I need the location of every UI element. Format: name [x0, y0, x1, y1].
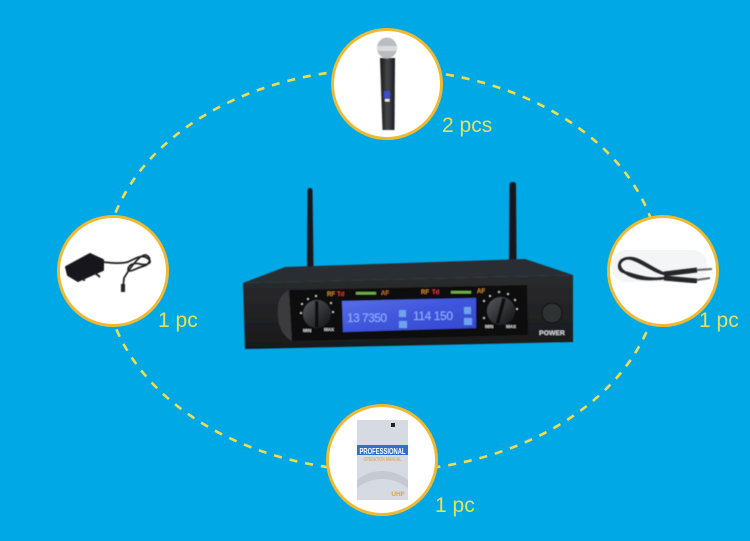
icon: manual booklet: OPERATION MANUAL [364, 457, 402, 463]
RF AF indicators [327, 289, 485, 298]
RF AF indicators: AF [477, 289, 485, 295]
receiver front [243, 275, 573, 349]
power button [542, 303, 562, 323]
power label: POWER [539, 330, 565, 337]
RF AF indicators: RF [327, 292, 335, 298]
frequency left: 13 7350 [347, 311, 387, 325]
level meters [356, 291, 471, 294]
knob labels: MAX [506, 324, 516, 329]
mic circle [332, 30, 442, 138]
panel notch [278, 290, 292, 341]
RF AF indicators: Td [432, 290, 440, 296]
knob labels: MAX [324, 327, 334, 332]
knob labels [303, 324, 516, 333]
manual circle [328, 406, 436, 514]
quantity label: 1 pc [158, 309, 198, 332]
channel boxes [399, 307, 472, 328]
icon: manual booklet: UHF [391, 491, 405, 498]
icon: power adapter [66, 254, 150, 292]
icon: manual booklet [357, 420, 408, 500]
RF AF indicators: AF [381, 291, 389, 297]
cable photo shadow [612, 250, 707, 282]
adapter circle [58, 216, 168, 326]
item: microphone [332, 30, 492, 138]
dashed ellipse connector [104, 69, 660, 471]
cable circle [608, 216, 718, 326]
icon: microphone [377, 38, 397, 130]
receiver top [243, 259, 573, 283]
knob labels: MIN [303, 328, 311, 333]
right knob [483, 291, 518, 325]
front panel [289, 285, 528, 341]
right antenna [509, 182, 516, 261]
item: user manual [328, 406, 475, 517]
left antenna [307, 188, 314, 267]
item: power adapter [58, 216, 198, 332]
left knob [300, 295, 334, 328]
quantity label: 2 pcs [442, 114, 492, 137]
receiver unit [243, 182, 573, 349]
knob labels: MIN [485, 324, 493, 329]
LCD display [342, 298, 476, 332]
quantity label: 1 pc [435, 494, 475, 517]
icon: manual booklet: PROFESSIONAL [360, 447, 406, 456]
quantity label: 1 pc [699, 309, 739, 332]
RF AF indicators: RF [421, 290, 429, 296]
icon: audio cable [619, 258, 712, 281]
RF AF indicators: Td [337, 292, 345, 298]
frequency right: 114 150 [413, 309, 453, 323]
item: audio cable [608, 216, 739, 332]
